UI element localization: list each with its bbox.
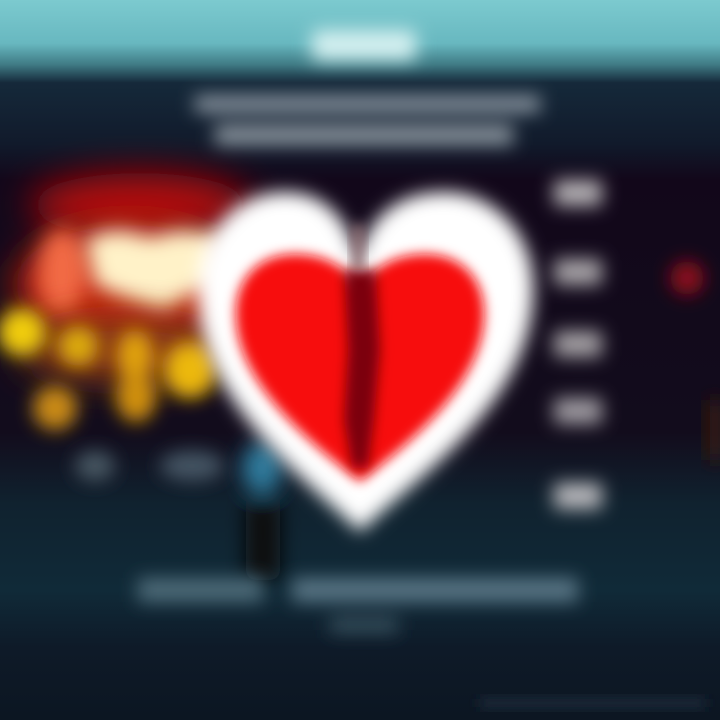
heart <box>198 192 533 532</box>
heart notch shadow <box>352 225 364 270</box>
heart fill <box>236 254 484 482</box>
lower amber glow <box>20 318 230 382</box>
yellow dots <box>0 308 216 430</box>
subtitle block <box>195 96 540 145</box>
small labels under dots <box>75 451 224 481</box>
bottom-right credit <box>480 698 705 708</box>
footer text block <box>138 578 578 632</box>
orange edge glow <box>708 400 720 460</box>
figure <box>242 442 282 580</box>
orange flame <box>38 228 86 316</box>
title <box>312 30 416 60</box>
heart outline <box>198 192 533 532</box>
red flame body <box>15 225 245 345</box>
illustration: fire and glow <box>15 173 250 382</box>
cream flame <box>85 230 225 312</box>
right-hand labels <box>554 180 602 509</box>
red marker <box>670 261 704 295</box>
red glow <box>30 173 250 237</box>
heart crack <box>344 270 380 468</box>
